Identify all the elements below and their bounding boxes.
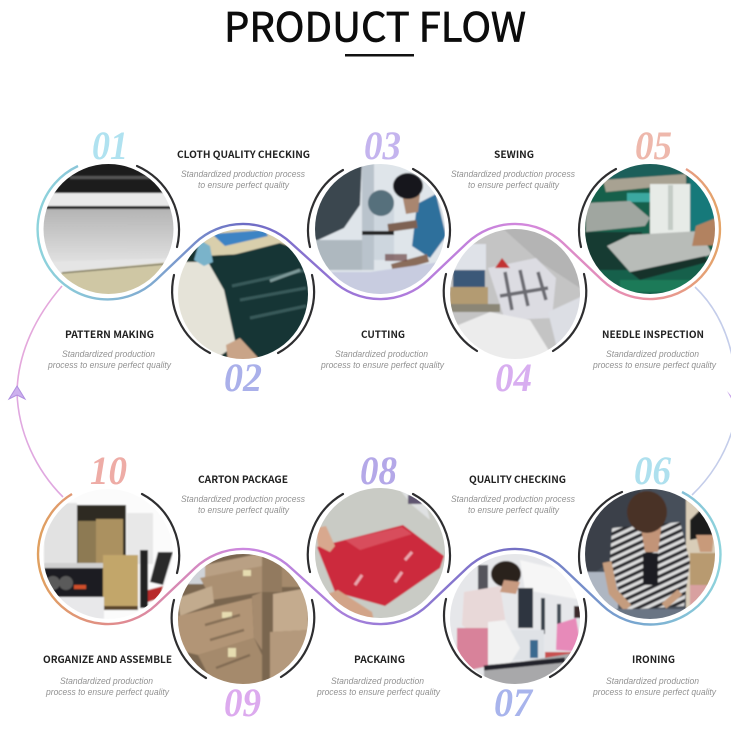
panel: step 10 photo: [44, 502, 173, 618]
number 07: 07: [494, 680, 534, 725]
text block: cutting: CUTTING: [361, 326, 405, 341]
text block: ironing: Standardized production: [606, 676, 699, 686]
number 08: 08: [360, 448, 397, 493]
number 09: 09: [224, 680, 261, 725]
text block: cutting: process to ensure perfect quality: [320, 360, 444, 370]
arrow: right connecting line: [692, 287, 731, 495]
text block: cloth quality checking: CLOTH QUALITY CHECKING: [177, 146, 310, 161]
panel: step 07 photo: [448, 552, 583, 690]
text block: cutting: [320, 326, 444, 370]
panel: step 09 photo: [175, 552, 311, 688]
text block: packaing: process to ensure perfect quality: [316, 687, 440, 697]
chart: top flow wave: [38, 166, 720, 299]
number 03: 03: [364, 123, 401, 168]
panel: step 05 photo: [585, 164, 715, 294]
number 02: 02: [224, 355, 262, 400]
text block: ironing: process to ensure perfect quality: [592, 687, 716, 697]
text block: organize and assemble: Standardized production: [60, 676, 153, 686]
text block: sewing: Standardized production process: [451, 169, 575, 179]
text block: carton package: CARTON PACKAGE: [198, 471, 288, 486]
panel: step 01 photo: [44, 164, 174, 294]
text block: carton package: [181, 471, 305, 515]
number 05: 05: [635, 123, 672, 168]
text block: cloth quality checking: to ensure perfect quality: [198, 180, 289, 190]
text block: sewing: SEWING: [494, 146, 534, 161]
text block: needle inspection: process to ensure perfect quality: [592, 360, 716, 370]
text block: pattern making: [47, 326, 171, 370]
text block: sewing: [451, 146, 575, 190]
text block: needle inspection: [592, 326, 716, 370]
number 06: 06: [634, 448, 671, 493]
text block: pattern making: PATTERN MAKING: [65, 326, 154, 341]
text block: pattern making: process to ensure perfect quality: [47, 360, 171, 370]
arrow: left return line with arrowhead: [9, 286, 63, 497]
chart: bottom flow wave: [38, 492, 720, 624]
number 01: 01: [92, 123, 128, 168]
text block: cutting: Standardized production: [335, 349, 428, 359]
text block: needle inspection: Standardized production: [606, 349, 699, 359]
text block: carton package: to ensure perfect quality: [198, 505, 289, 515]
text block: packaing: [316, 651, 440, 697]
text block: cloth quality checking: [177, 146, 310, 190]
number 10: 10: [90, 448, 127, 493]
panel: step 08 photo: [315, 488, 445, 618]
text block: carton package: Standardized production process: [181, 494, 305, 504]
text block: quality checking: [451, 471, 575, 515]
text block: cloth quality checking: Standardized production process: [181, 169, 305, 179]
text block: ironing: [592, 651, 716, 697]
panel: step 06 photo: [582, 486, 718, 622]
panel: step 03 photo: [315, 164, 445, 294]
text block: quality checking: QUALITY CHECKING: [469, 471, 566, 486]
number 04: 04: [495, 355, 532, 400]
text block: pattern making: Standardized production: [62, 349, 155, 359]
text block: organize and assemble: ORGANIZE AND ASSEMBLE: [43, 651, 172, 666]
text block: sewing: to ensure perfect quality: [468, 180, 559, 190]
text block: organize and assemble: [43, 651, 172, 697]
text block: packaing: PACKAING: [354, 651, 405, 666]
text block: quality checking: to ensure perfect quality: [468, 505, 559, 515]
panel: step 04 photo: [448, 226, 585, 362]
text block: organize and assemble: process to ensure perfect quality: [45, 687, 169, 697]
dark ring arcs: [137, 166, 622, 678]
text block: quality checking: Standardized production process: [451, 494, 575, 504]
text block: ironing: IRONING: [632, 651, 675, 666]
panel: step 02 photo: [178, 229, 308, 359]
text block: packaing: Standardized production: [331, 676, 424, 686]
text block: needle inspection: NEEDLE INSPECTION: [602, 326, 704, 341]
